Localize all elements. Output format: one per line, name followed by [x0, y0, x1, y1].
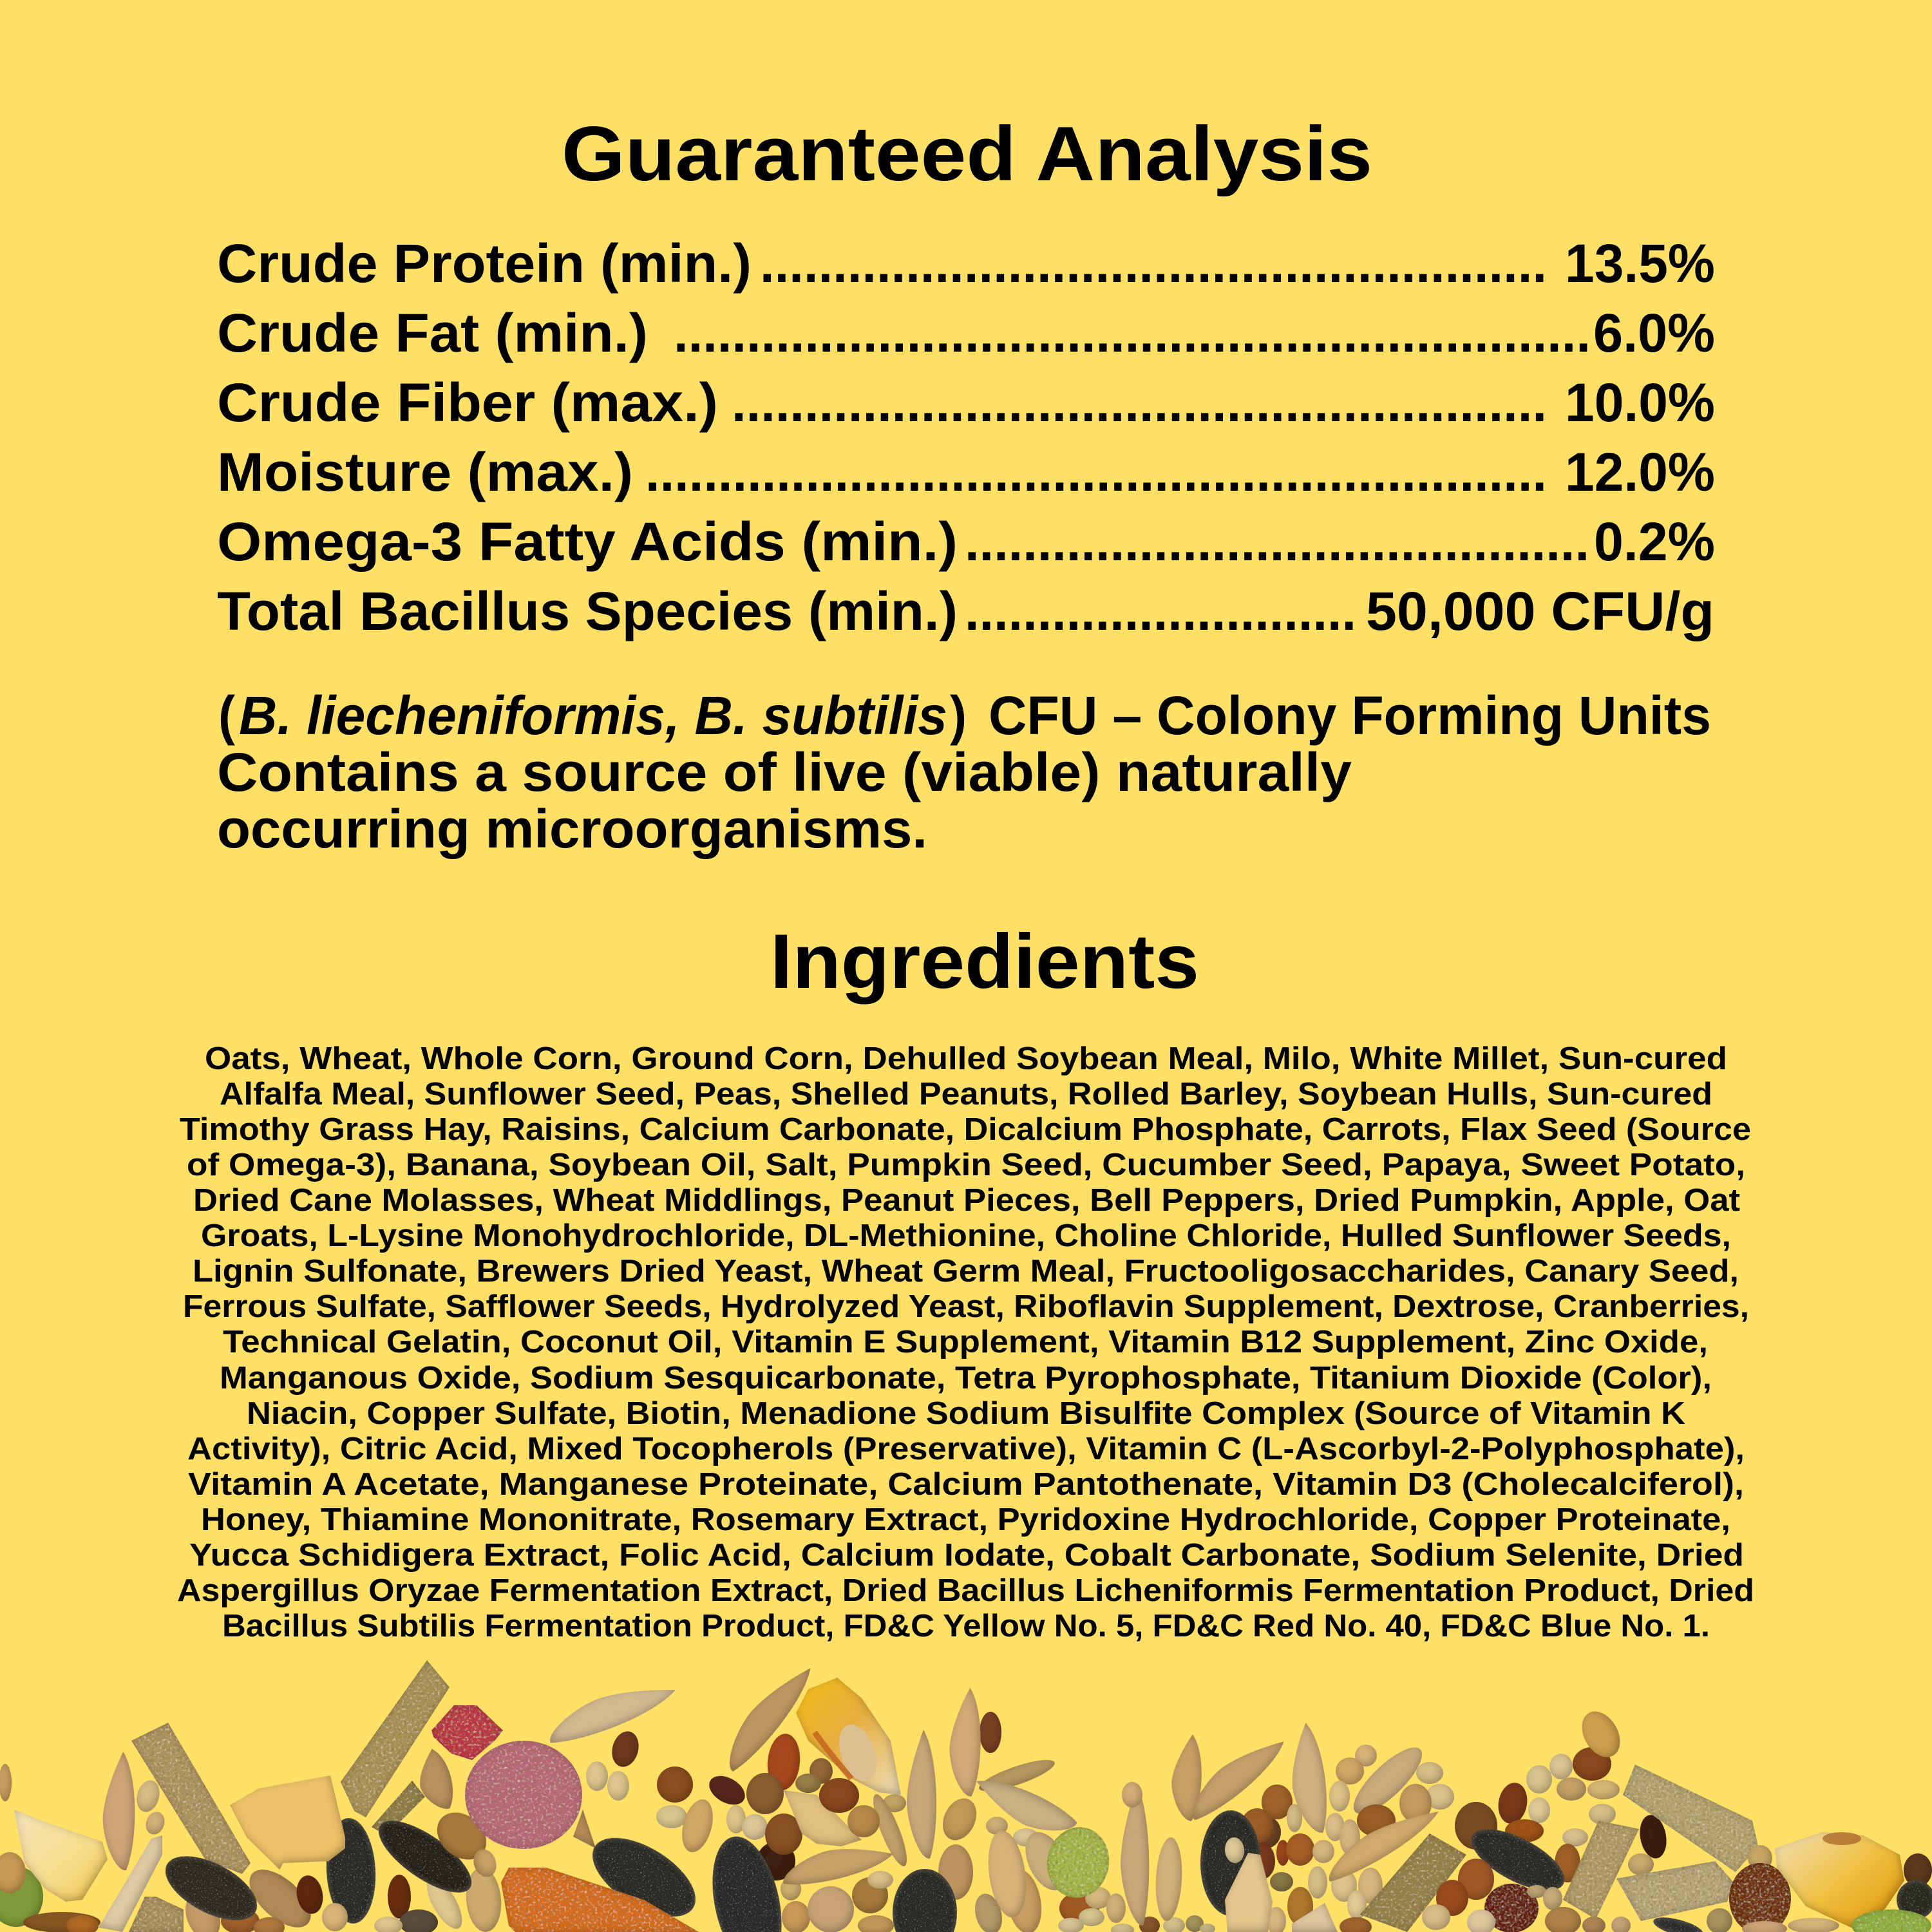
- note text block: [217, 685, 1711, 859]
- ingredients list: Ferrous Sulfate, Safflower Seeds, Hydrolyzed Yeast, Riboflavin Supplement, Dextrose, Cranberries,: [183, 1289, 1749, 1324]
- ingredients list: Honey, Thiamine Mononitrate, Rosemary Extract, Pyridoxine Hydrochloride, Copper Proteinate,: [201, 1502, 1730, 1537]
- row: moisture: Moisture (max.): [217, 442, 633, 502]
- ingredients list: Dried Cane Molasses, Wheat Middlings, Peanut Pieces, Bell Peppers, Dried Pumpkin, Apple, Oat: [193, 1183, 1740, 1218]
- ingredients list: Oats, Wheat, Whole Corn, Ground Corn, Dehulled Soybean Meal, Milo, White Millet, Sun-cured: [205, 1041, 1727, 1076]
- row: crude fat: 6.0%: [1593, 303, 1715, 363]
- row: crude fiber: 10.0%: [1565, 372, 1715, 433]
- row: crude protein: ......................................................: [760, 233, 1547, 294]
- row: crude fiber: Crude Fiber (max.): [217, 372, 718, 433]
- illustration: seeds, grains and pellets: [0, 1657, 1932, 1932]
- heading: Ingredients: Ingredients: [770, 918, 1199, 1005]
- right cluster: [1286, 1705, 1932, 1932]
- left cluster: [0, 1660, 708, 1932]
- ingredients list: Lignin Sulfonate, Brewers Dried Yeast, Wheat Germ Meal, Fructooligosaccharides, Canary Seed,: [193, 1254, 1739, 1289]
- note text block: ): [950, 685, 967, 746]
- row: total bacillus: ...........................: [965, 581, 1356, 641]
- row: moisture: 12.0%: [1565, 442, 1715, 502]
- row: crude fat: [217, 303, 1715, 363]
- center cluster: [656, 1657, 1115, 1932]
- note text block: CFU – Colony Forming Units: [989, 685, 1711, 746]
- note text block: (: [218, 685, 235, 746]
- row: crude fat: Crude Fat (min.): [217, 303, 648, 363]
- mid-right cluster: [1106, 1728, 1293, 1932]
- ingredients list: Activity), Citric Acid, Mixed Tocopherols (Preservative), Vitamin C (L-Ascorbyl-2-Polyphosphate),: [187, 1432, 1745, 1466]
- row: total bacillus: Total Bacillus Species (min.): [217, 581, 958, 641]
- ingredients list: Alfalfa Meal, Sunflower Seed, Peas, Shelled Peanuts, Rolled Barley, Soybean Hulls, Sun-cured: [220, 1077, 1712, 1112]
- ingredients list: Vitamin A Acetate, Manganese Proteinate, Calcium Pantothenate, Vitamin D3 (Cholecalciferol),: [188, 1467, 1744, 1502]
- row: total bacillus: [217, 581, 1714, 641]
- row: crude protein: Crude Protein (min.): [217, 233, 752, 294]
- row: crude fiber: ........................................................: [732, 372, 1547, 433]
- note text block: occurring microorganisms.: [217, 799, 927, 859]
- row: moisture: ..............................................................: [645, 442, 1547, 502]
- ingredients list: of Omega-3), Banana, Soybean Oil, Salt, Pumpkin Seed, Cucumber Seed, Papaya, Sweet Potato,: [187, 1148, 1745, 1182]
- row: crude fiber: [217, 372, 1715, 433]
- heading: Guaranteed Analysis: Guaranteed Analysis: [562, 111, 1372, 197]
- row: omega-3: 0.2%: [1594, 511, 1715, 572]
- ingredients list: [177, 1041, 1754, 1643]
- row: moisture: [217, 442, 1715, 502]
- row: crude protein: 13.5%: [1565, 233, 1715, 294]
- ingredients list: Yucca Schidigera Extract, Folic Acid, Calcium Iodate, Cobalt Carbonate, Sodium Selenite, Dried: [189, 1538, 1744, 1573]
- row: omega-3: Omega-3 Fatty Acids (min.): [217, 511, 958, 572]
- ingredients list: Timothy Grass Hay, Raisins, Calcium Carbonate, Dicalcium Phosphate, Carrots, Flax Seed (Source: [180, 1112, 1751, 1147]
- ingredients list: Technical Gelatin, Coconut Oil, Vitamin E Supplement, Vitamin B12 Supplement, Zinc Oxide,: [223, 1325, 1708, 1359]
- ingredients list: Bacillus Subtilis Fermentation Product, FD&C Yellow No. 5, FD&C Red No. 40, FD&C Blue No. 1.: [222, 1609, 1710, 1643]
- ingredients list: Groats, L-Lysine Monohydrochloride, DL-Methionine, Choline Chloride, Hulled Sunflower Seeds,: [201, 1218, 1731, 1253]
- row: omega-3: [217, 511, 1715, 572]
- row: total bacillus: 50,000 CFU/g: [1366, 581, 1714, 641]
- row: crude fat: ...............................................................: [674, 303, 1591, 363]
- note text block: Contains a source of live (viable) naturally: [217, 742, 1352, 802]
- ingredients list: Niacin, Copper Sulfate, Biotin, Menadione Sodium Bisulfite Complex (Source of Vitamin K: [247, 1396, 1685, 1431]
- analysis table: [217, 233, 1715, 641]
- ingredients list: Aspergillus Oryzae Fermentation Extract, Dried Bacillus Licheniformis Fermentation Product, Dried: [177, 1573, 1754, 1608]
- note text block: B. liecheniformis, B. subtilis: [239, 685, 947, 746]
- row: crude protein: [217, 233, 1715, 294]
- ingredients list: Manganous Oxide, Sodium Sesquicarbonate, Tetra Pyrophosphate, Titanium Dioxide (Color),: [220, 1361, 1712, 1396]
- row: omega-3: ...........................................: [965, 511, 1589, 572]
